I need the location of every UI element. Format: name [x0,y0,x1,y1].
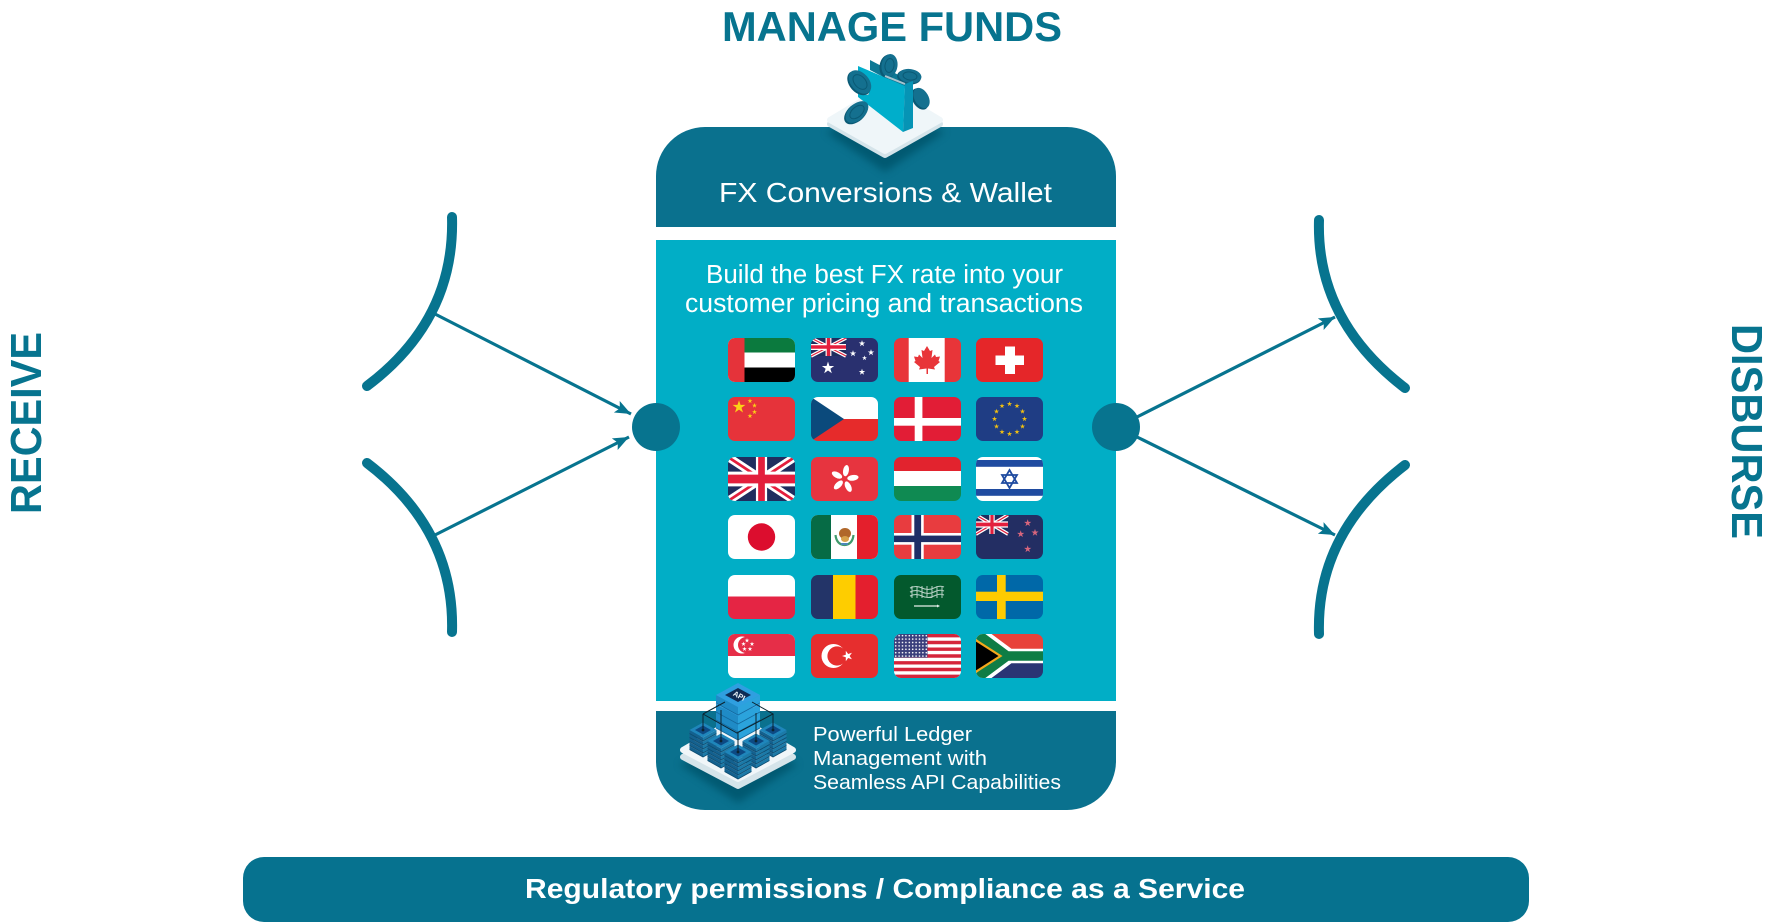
panel: fx conversions header [656,127,1116,227]
flag: czech republic [811,397,878,441]
flag: saudi arabia [894,575,961,619]
flag: sweden [976,575,1043,619]
arrow: receive top to node [435,314,631,414]
flag: hong kong [811,457,878,501]
flag: uae [728,338,795,382]
flag: australia [811,338,878,382]
arrow: node to disburse top [1137,317,1335,417]
flag: singapore [728,634,795,678]
icon: api server stack [679,683,798,803]
flag: norway [894,515,961,559]
panel: ledger management: Management with [813,747,987,770]
icon: wallet with coins [826,53,945,172]
panel: fx rate currencies [656,240,1116,701]
flag: south africa [976,634,1043,678]
flag: hungary [894,457,961,501]
panel: fx rate currencies: customer pricing and transactions [685,290,1083,318]
label: receive: RECEIVE [2,332,51,514]
node: disburse connector [1092,403,1140,451]
panel: ledger management: Seamless API Capabilities [813,771,1061,794]
panel: ledger management: Powerful Ledger [813,723,972,746]
flag: canada [894,338,961,382]
flag: romania [811,575,878,619]
flag: switzerland [976,338,1043,382]
diagram: receive arcs [367,217,452,632]
flag: poland [728,575,795,619]
flag: usa [894,634,961,678]
flag: israel [976,457,1043,501]
icon: api server stack: API [732,689,747,703]
banner: regulatory compliance: Regulatory permissions / Compliance as a Service [525,873,1245,904]
node: receive connector [632,403,680,451]
flag: united kingdom [728,457,795,501]
arrow: receive bottom to node [435,437,629,535]
flag: japan [728,515,795,559]
panel: fx conversions header: FX Conversions & Wallet [719,177,1052,208]
flag: european union [976,397,1043,441]
label: disburse: DISBURSE [1722,324,1771,539]
arrow: node to disburse bottom [1137,437,1335,535]
title: manage funds: MANAGE FUNDS [722,3,1062,50]
banner: regulatory compliance [243,857,1529,922]
flag: denmark [894,397,961,441]
flag: turkey [811,634,878,678]
flag: new zealand [976,515,1043,559]
diagram: disburse arcs [1319,220,1405,634]
panel: ledger management [656,711,1116,810]
panel: fx rate currencies: Build the best FX rate into your [706,261,1064,289]
flag: china [728,397,795,441]
flag: mexico [811,515,878,559]
